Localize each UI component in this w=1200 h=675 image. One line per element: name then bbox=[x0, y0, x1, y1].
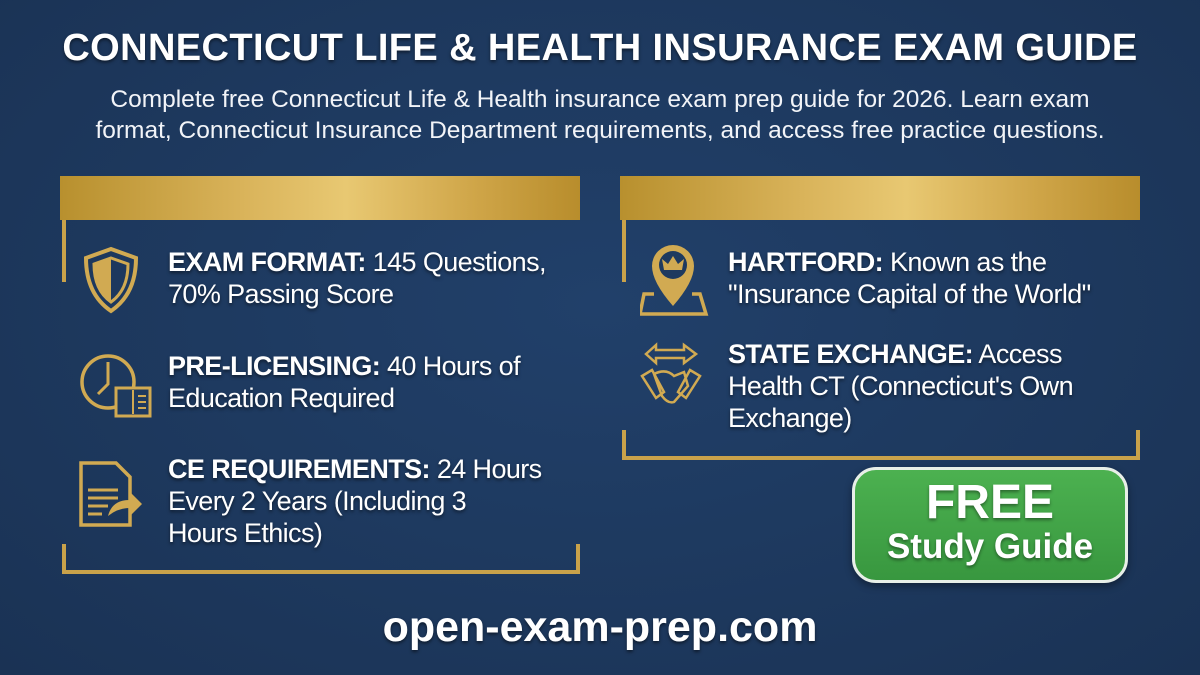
button: free study guide bbox=[852, 467, 1128, 583]
icon: clock book bbox=[80, 354, 152, 418]
icon: document arrow bbox=[79, 461, 142, 527]
button: free study guide: FREE bbox=[926, 476, 1054, 529]
icon: handshake exchange bbox=[640, 342, 702, 404]
panel: left bbox=[60, 176, 580, 574]
icon: map pin crown bbox=[640, 245, 708, 316]
text: state exchange: STATE EXCHANGE: Access bbox=[728, 339, 1062, 369]
panel: right bbox=[620, 176, 1140, 460]
text: Hartford bbox=[728, 247, 1092, 312]
text: pre-licensing bbox=[168, 351, 522, 416]
text: CE requirements: CE REQUIREMENTS: 24 Hours bbox=[168, 454, 542, 484]
footer url: open-exam-prep.com bbox=[383, 603, 817, 651]
text: state exchange bbox=[728, 339, 1074, 436]
text: exam format bbox=[168, 247, 546, 312]
text: state exchange: Exchange) bbox=[728, 403, 852, 433]
subtitle bbox=[95, 86, 1105, 144]
subtitle: format, Connecticut Insurance Department requirements, and access free practice questions. bbox=[95, 117, 1105, 144]
text: pre-licensing: PRE-LICENSING: 40 Hours of bbox=[168, 351, 520, 381]
text: state exchange: Health CT (Connecticut's Own bbox=[728, 371, 1073, 401]
subtitle: Complete free Connecticut Life & Health insurance exam prep guide for 2026. Learn exam bbox=[110, 86, 1090, 113]
text: exam format: 70% Passing Score bbox=[168, 279, 393, 309]
text: Hartford: "Insurance Capital of the World" bbox=[728, 279, 1091, 309]
text: CE requirements bbox=[168, 454, 542, 550]
button: free study guide: Study Guide bbox=[887, 527, 1093, 566]
text: CE requirements: Hours Ethics) bbox=[168, 518, 322, 548]
title: CONNECTICUT LIFE & HEALTH INSURANCE EXAM GUIDE bbox=[62, 27, 1138, 69]
text: exam format: EXAM FORMAT: 145 Questions, bbox=[168, 247, 546, 277]
text: Hartford: HARTFORD: Known as the bbox=[728, 247, 1046, 277]
text: pre-licensing: Education Required bbox=[168, 383, 394, 413]
text: CE requirements: Every 2 Years (Including 3 bbox=[168, 486, 466, 516]
icon: shield bbox=[84, 246, 138, 314]
